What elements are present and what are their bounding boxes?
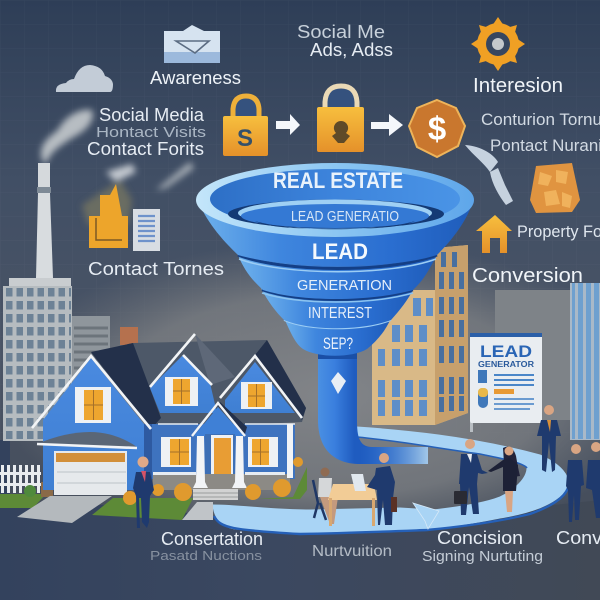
- text block: consertation: Pasatd Nuctions: [150, 548, 263, 563]
- funnel inner bowl: [210, 169, 460, 229]
- person: right man one: [566, 444, 584, 522]
- text block: concision: [422, 528, 543, 565]
- icon: burning factory document: [82, 162, 194, 251]
- icon: gold padlock one: [223, 96, 268, 156]
- text block: social media top: Social Me: [297, 22, 385, 42]
- desk with papers: [328, 474, 377, 526]
- orange flower shrubs: [123, 457, 303, 505]
- lawn: [0, 467, 307, 520]
- icon: cloud: [56, 65, 113, 92]
- icon: coin pile: [530, 163, 580, 213]
- lead generation billboard: [470, 333, 542, 432]
- icon: gold padlock one: S: [237, 125, 253, 152]
- icon: dollar coin: $: [428, 110, 446, 147]
- text block: social media left: [87, 105, 206, 159]
- funnel label: lead generation: LEAD GENERATIO: [291, 208, 399, 225]
- glass skyscraper: [570, 283, 600, 440]
- text block: conversion right: [481, 110, 600, 155]
- ground: [0, 440, 600, 600]
- gable walls: [43, 358, 144, 490]
- funnel label: sep: SEP?: [323, 334, 353, 353]
- icon: orange house: [476, 215, 515, 253]
- person: agent at desk: [367, 453, 397, 525]
- text block: consertation: Consertation: [161, 529, 263, 549]
- person: standing man by sign: [537, 405, 561, 472]
- ribbon notch arrow: [413, 503, 439, 529]
- windows upper: [75, 377, 272, 423]
- distant building: [72, 316, 110, 382]
- text block: social media top: Ads, Adss: [310, 40, 393, 60]
- text block: consertation: [150, 529, 263, 563]
- roof: [91, 340, 306, 429]
- icon: envelope card: [164, 25, 220, 63]
- funnel label: lead: LEAD: [312, 239, 368, 264]
- spout and road ribbon: [213, 355, 568, 534]
- text block: conversion right: Conturion Tornu: [481, 110, 600, 129]
- label: awareness: Awareness: [150, 68, 241, 88]
- icon: dollar coin: [409, 100, 465, 157]
- tan office building: [372, 245, 468, 425]
- person: handshake man: [454, 439, 488, 515]
- picket fence: [0, 465, 41, 493]
- chimney: [120, 327, 138, 345]
- windows lower: [161, 437, 278, 467]
- label: interesion: Interesion: [473, 75, 563, 97]
- arrow: first: [276, 114, 300, 135]
- right distant building: [495, 290, 573, 420]
- text block: social media top: [297, 22, 393, 60]
- funnel: [196, 163, 474, 359]
- text block: concision: Concision: [437, 528, 523, 548]
- text block: social media left: Contact Forits: [87, 139, 204, 159]
- text block: concision: Signing Nurtuting: [422, 548, 543, 565]
- funnel label: generation: GENERATION: [297, 277, 392, 294]
- left skyscraper: [3, 286, 72, 441]
- road ribbon: [213, 427, 568, 533]
- text block: conversion right: Pontact Nurani: [490, 136, 600, 155]
- lead generation billboard: GENERATOR: [478, 360, 534, 369]
- person: handshake woman: [488, 446, 520, 512]
- arrow: second: [371, 114, 403, 136]
- text block: social media left: Hontact Visits: [96, 124, 206, 141]
- porch: [153, 424, 293, 500]
- path: [182, 502, 213, 520]
- label: nurtvuition: Nurtvuition: [312, 543, 392, 560]
- ribbon edges: [214, 437, 568, 534]
- label: conv: Conv: [556, 528, 600, 548]
- white gable trim: [32, 334, 302, 429]
- person: right man two: [586, 442, 600, 518]
- label: contact tornes: Contact Tornes: [88, 259, 224, 279]
- curved white arrow: [465, 145, 513, 205]
- icon: gear: [471, 17, 525, 71]
- factory chimney with smoke: [9, 110, 93, 288]
- house: [0, 327, 307, 523]
- funnel label: real estate: REAL ESTATE: [273, 168, 403, 193]
- text block: social media left: Social Media: [99, 105, 205, 125]
- person: seated woman at desk: [313, 468, 338, 524]
- spout: [318, 355, 428, 464]
- lead generation billboard: LEAD: [480, 342, 532, 361]
- icon: gold padlock two: [317, 86, 364, 152]
- funnel label: interest: INTEREST: [308, 305, 372, 322]
- funnel rim: [196, 163, 474, 237]
- front door: [205, 434, 235, 490]
- entry gable: [192, 402, 247, 436]
- person: agent by house: [133, 456, 154, 528]
- label: conversion: Conversion: [472, 265, 583, 287]
- driveway: [17, 496, 112, 523]
- garage: [37, 432, 137, 495]
